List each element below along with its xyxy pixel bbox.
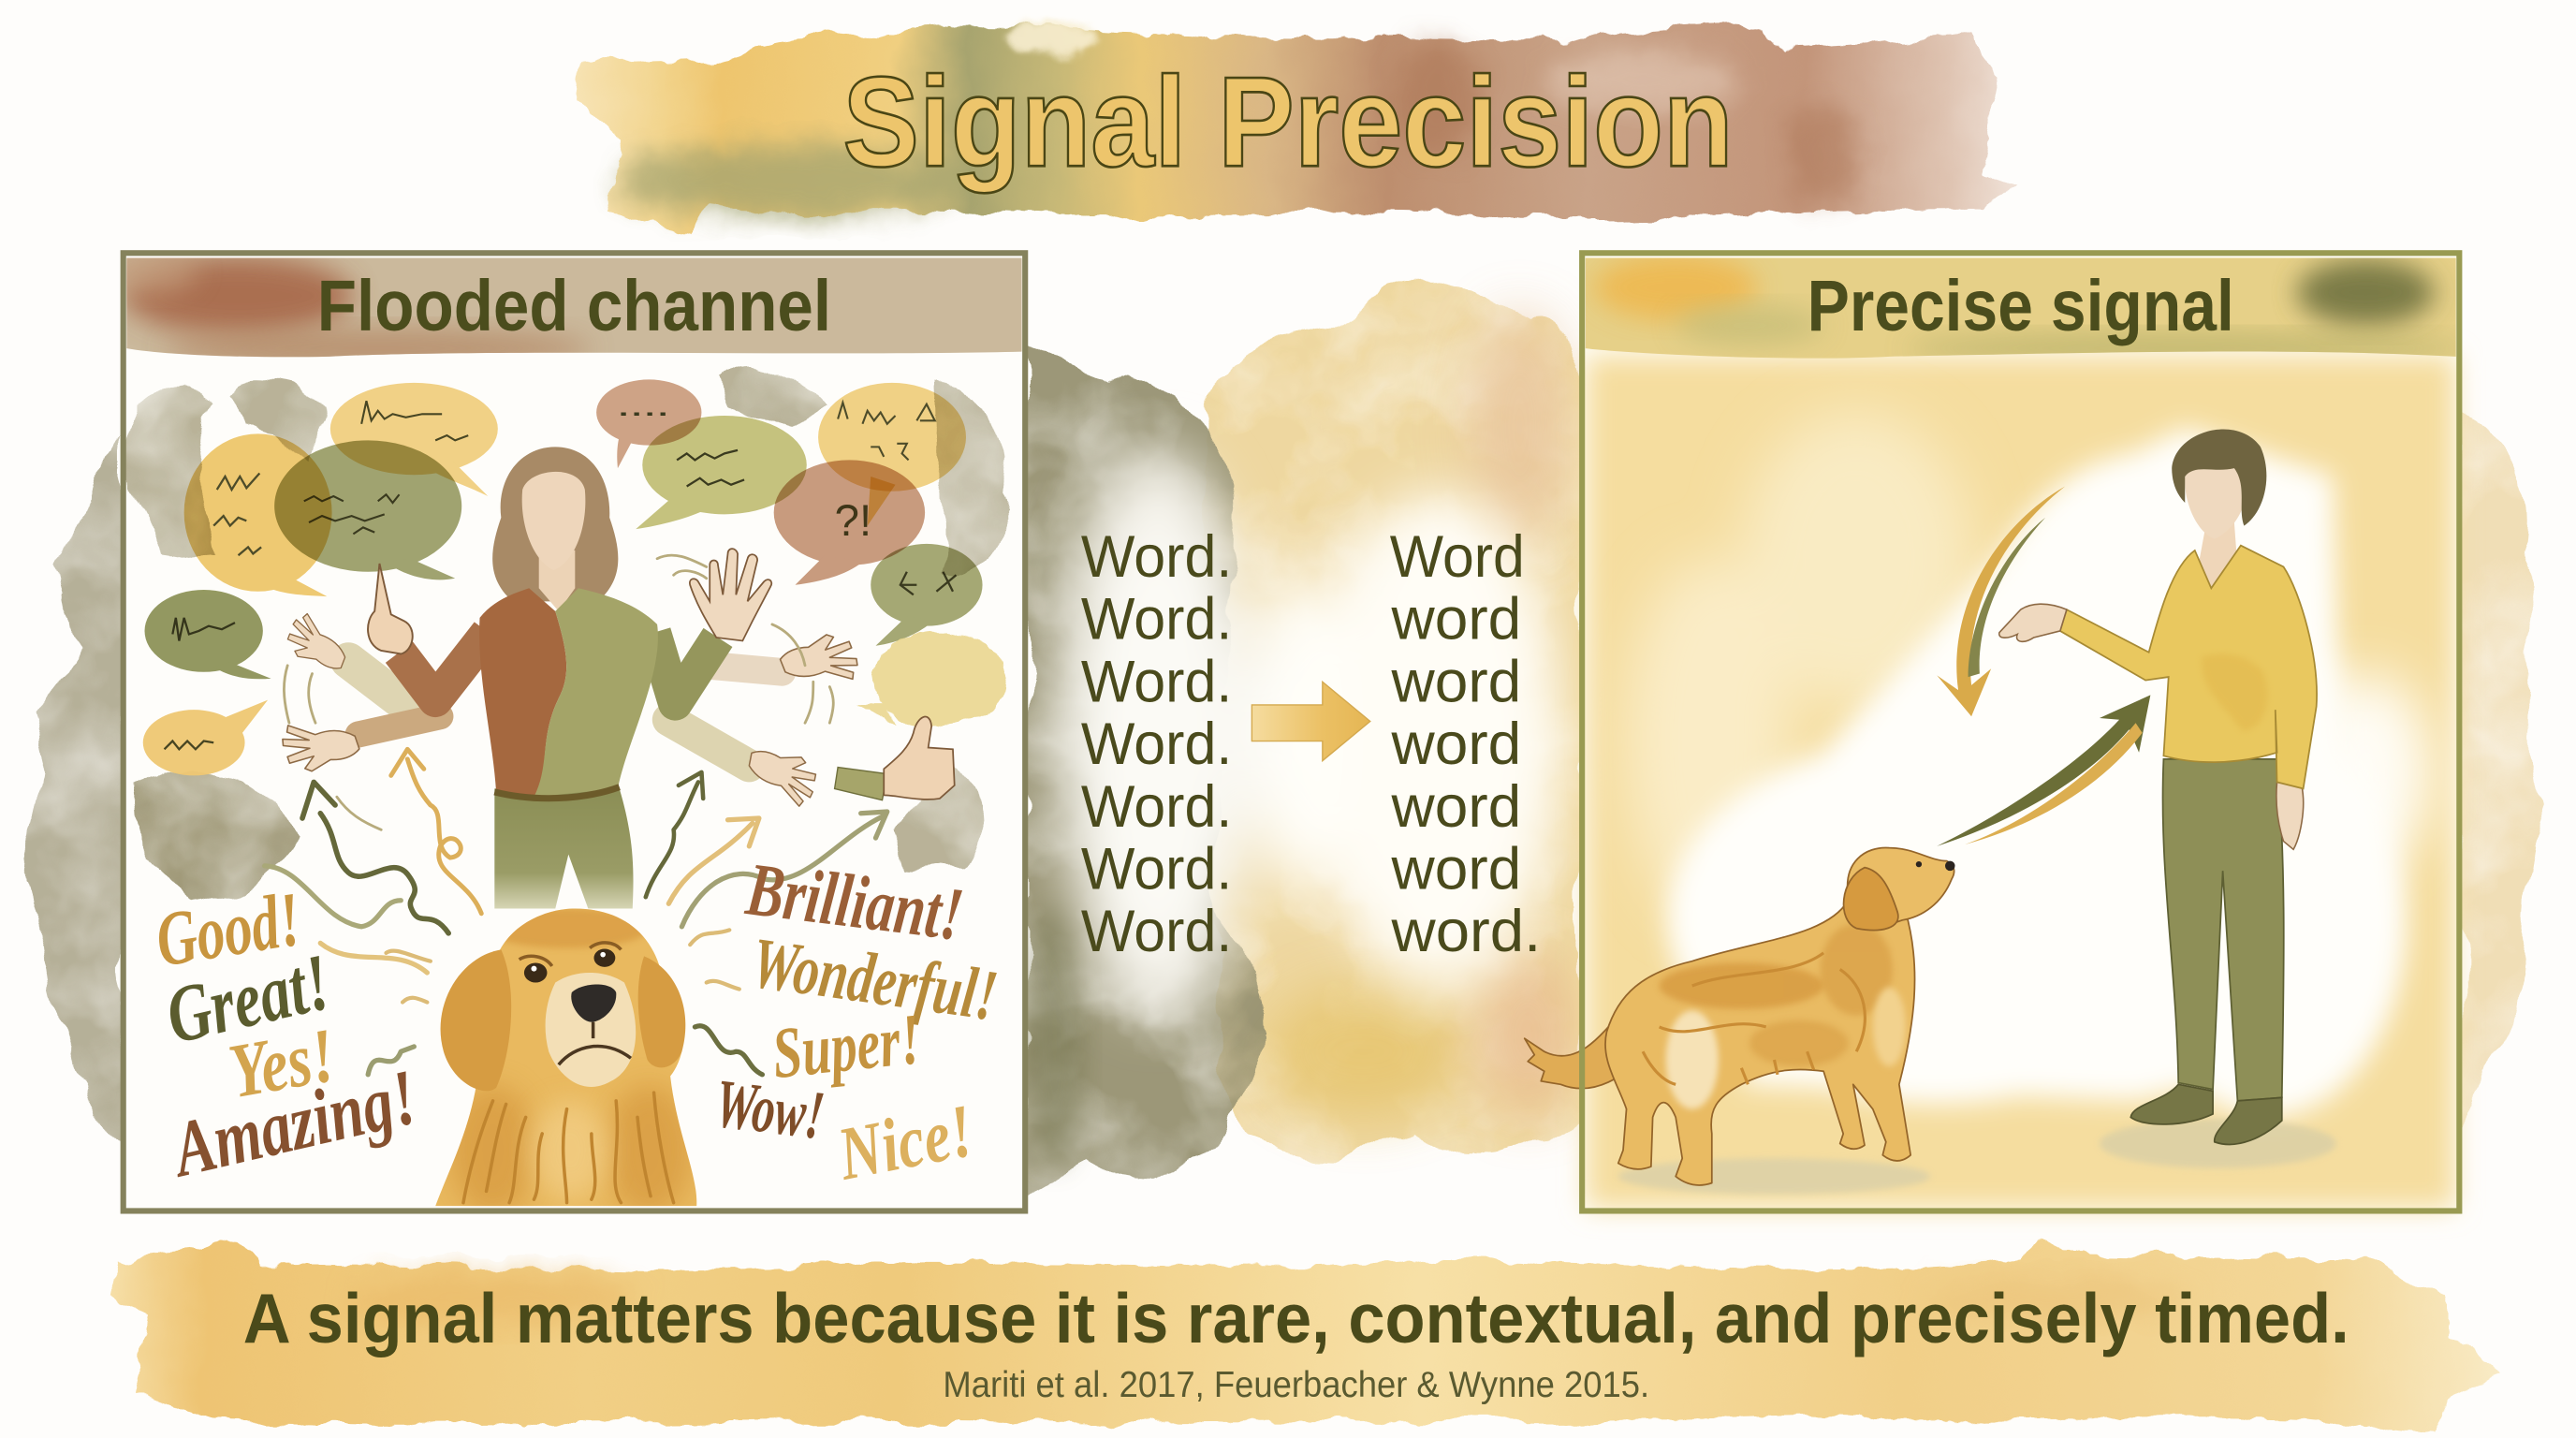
body fur shading [1643, 953, 1865, 1084]
arm: pale right upper [708, 631, 859, 689]
speech bubble: faint yellow [857, 629, 1007, 727]
face [522, 472, 585, 570]
word: Yes!: Yes! [223, 1012, 342, 1114]
peach accents [1265, 312, 1577, 1117]
sweater brown half [479, 588, 566, 795]
middle watercolor washes [1025, 286, 1580, 1191]
grey watercolor blotches [131, 371, 1008, 901]
column: separate words: Word. [1081, 774, 1232, 840]
panel frame [1582, 253, 2459, 1211]
arrow: olive wave [265, 866, 401, 927]
column: running sentence: word [1391, 712, 1521, 777]
figure: golden retriever attentive [1525, 847, 1955, 1199]
header: flooded channel [126, 258, 1022, 358]
header band [126, 258, 1022, 358]
speech bubble: brown dots [596, 379, 701, 468]
sweater olive half [534, 588, 658, 797]
word: Amazing!: Amazing! [162, 1053, 425, 1195]
small squiggle right [695, 1026, 762, 1075]
banner watercolor wash [107, 1239, 2502, 1432]
nose [1945, 861, 1955, 871]
speech bubble: olive left [145, 590, 271, 679]
tail [1525, 1005, 1647, 1089]
question mark: ?! [835, 496, 871, 546]
nose [571, 984, 616, 1022]
arm: brown lower left [282, 716, 440, 773]
neck [539, 550, 575, 611]
header band [1586, 258, 2456, 359]
eye right [590, 943, 621, 967]
hair [492, 447, 618, 601]
tan yellow wash [1201, 286, 1580, 1153]
motion lines [284, 555, 833, 829]
arrow: olive squiggle [302, 782, 448, 933]
hanging hand [2276, 782, 2304, 849]
header title: Precise signal [1808, 266, 2234, 346]
column: separate words: Word. [1081, 587, 1232, 653]
column: separate words: Word. [1081, 524, 1232, 590]
shoes [2130, 1084, 2282, 1144]
panel background [122, 252, 1027, 1212]
title text: Signal Precision [842, 51, 1734, 194]
background wash: left of flooded panel [23, 431, 124, 1158]
speech bubble: yellow top [330, 383, 498, 496]
bottom banner [107, 1239, 2502, 1432]
belt [494, 787, 620, 799]
speech bubble: yellow scribble [818, 383, 966, 492]
small squiggle left [368, 1047, 414, 1075]
column: running sentence: word [1391, 836, 1521, 902]
column: running sentence: word [1391, 649, 1521, 714]
column: running sentence: word [1391, 774, 1521, 840]
speech bubble: olive [274, 440, 461, 580]
pale clearing behind word columns [1060, 448, 1560, 1014]
header: precise signal [1586, 258, 2456, 359]
chest fur [463, 1093, 674, 1203]
column: separate words [1081, 524, 1232, 964]
mane [435, 908, 696, 1206]
speech bubble: olive glyphs [871, 544, 983, 646]
panel: precise signal [1525, 246, 2465, 1212]
citation: Mariti et al. 2017, Feuerbacher & Wynne 2015. [943, 1365, 1649, 1405]
column: separate words: Word. [1081, 836, 1232, 902]
arm: pale right lower [668, 720, 824, 809]
white clearing around figures [1667, 427, 2407, 1117]
word: Super!: Super! [768, 998, 924, 1093]
background wash: right of precise panel [2459, 411, 2543, 1134]
word: Good!: Good! [151, 876, 306, 983]
word: Brilliant!: Brilliant! [741, 847, 968, 957]
floor shadow: person [2100, 1119, 2336, 1168]
extra gesturing arms [280, 610, 955, 809]
small gold dashes [386, 930, 739, 1003]
word: Great!: Great! [158, 936, 338, 1061]
panel frame [124, 253, 1025, 1211]
column: running sentence [1390, 524, 1541, 964]
column: separate words: Word. [1081, 712, 1232, 777]
neck [2198, 522, 2237, 588]
head [1848, 847, 1954, 925]
signal hand [1999, 604, 2067, 641]
arrow: long olive [681, 812, 887, 927]
ear left [441, 949, 511, 1091]
column: running sentence: word. [1391, 899, 1541, 964]
speech bubble: yellow large [184, 433, 332, 596]
column: separate words: Word. [1081, 649, 1232, 714]
pants [2163, 759, 2284, 1101]
speech bubble: olive yellow [636, 416, 807, 529]
eye [1916, 861, 1922, 867]
arrow: cue down [1937, 486, 2065, 716]
yellow wash [1587, 357, 2454, 1208]
takeaway text: A signal matters because it is rare, contextual, and precisely timed. [243, 1279, 2349, 1357]
title watercolor wash [578, 26, 2017, 233]
light patches in wash [1627, 411, 2431, 920]
mouth [559, 1022, 631, 1064]
scattered exclamation words [151, 847, 1003, 1196]
arrow: olive small [646, 772, 703, 897]
arrow between columns [1251, 682, 1370, 761]
hair [2172, 430, 2266, 526]
pants [494, 788, 634, 909]
column: separate words: Word. [1081, 899, 1232, 964]
eye left [520, 956, 552, 983]
title banner [578, 26, 2017, 233]
arm: thumbs up [835, 717, 955, 800]
speech bubbles [143, 379, 1007, 775]
upper arm left [400, 633, 488, 700]
word: Nice!: Nice! [831, 1089, 980, 1196]
speech bubble: brown question [774, 460, 925, 585]
motion squiggle arrows [265, 555, 887, 1075]
word: Wow!: Wow! [711, 1064, 828, 1153]
figure: person giving signal [1999, 430, 2317, 1144]
ear [1844, 868, 1898, 931]
word: Wonderful!: Wonderful! [747, 922, 1003, 1035]
sweater [2060, 546, 2317, 788]
panel: flooded channel [98, 246, 1035, 1216]
arrow: gold right [668, 818, 759, 903]
word columns [1081, 524, 1541, 964]
ear right [638, 956, 685, 1067]
header title: Flooded channel [317, 266, 831, 346]
upper arm right [654, 633, 718, 703]
figure: golden retriever looking up [435, 908, 696, 1206]
arrow: attention up [1937, 695, 2150, 846]
arm: pale upper left [280, 610, 404, 703]
column: running sentence: Word [1390, 524, 1525, 590]
muzzle [546, 973, 636, 1087]
body [1606, 908, 1914, 1185]
hand open [690, 549, 771, 640]
hand pointing [368, 564, 413, 654]
figure: overwhelmed person [368, 447, 771, 909]
floor shadow: dog [1618, 1158, 1930, 1195]
body outline [1605, 901, 1915, 1185]
face [2185, 459, 2247, 539]
speech bubble: yellow small [143, 700, 268, 775]
panel background [1580, 252, 2461, 1212]
arrow: gold loop [391, 749, 481, 914]
column: running sentence: word [1391, 587, 1521, 653]
wavy stroke: gold [320, 943, 427, 973]
olive grey wash [1027, 353, 1262, 1191]
